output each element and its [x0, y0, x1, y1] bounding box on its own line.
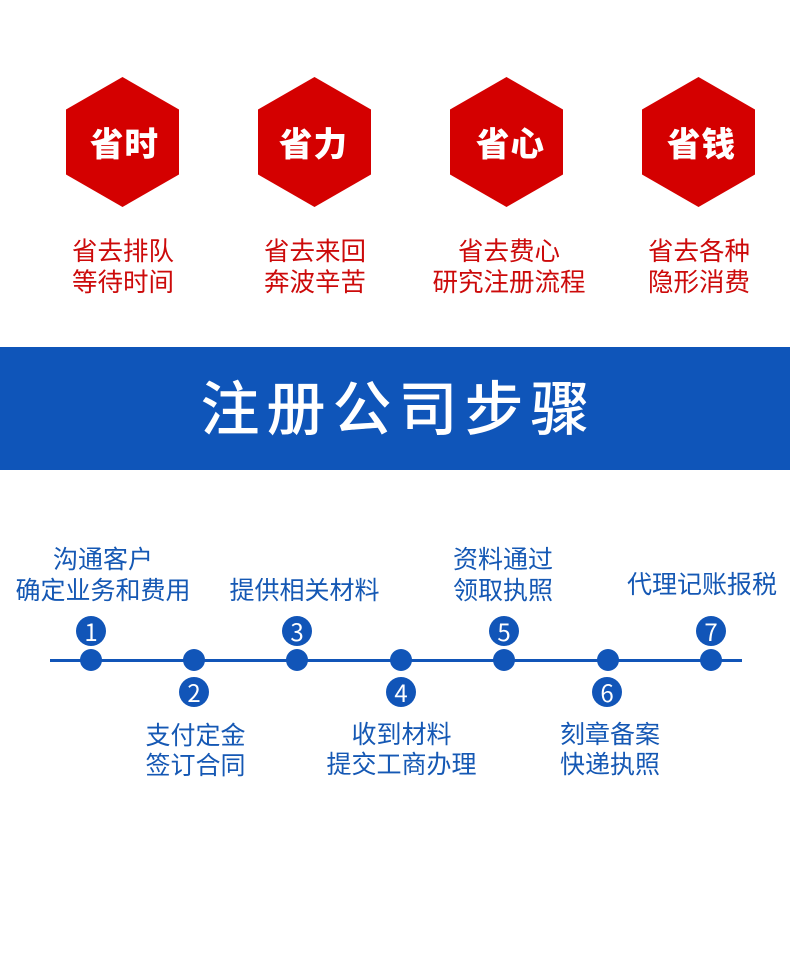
- heading: 省力: 省力: [279, 117, 348, 166]
- step 2 number: 2: [187, 674, 201, 709]
- timeline dot 6: [596, 649, 618, 671]
- text: 省去各种 隐形消费: [648, 238, 750, 297]
- step 6 text: 刻章备案: [560, 721, 660, 749]
- step 2 number: [179, 677, 209, 707]
- step 5 text: 领取执照: [453, 576, 553, 604]
- timeline dot 4: [390, 649, 412, 671]
- step 7 number: [696, 616, 726, 646]
- step 4 text: 提交工商办理: [326, 751, 476, 779]
- heading: 省心: 省心: [476, 117, 545, 166]
- step 1 number: [76, 616, 106, 646]
- banner: [0, 347, 790, 470]
- text: 省去费心 研究注册流程: [432, 238, 586, 297]
- heading: 省时: 省时: [90, 117, 159, 166]
- step 6 number: [592, 677, 622, 707]
- text: 省去来回 奔波辛苦: 奔波辛苦: [264, 269, 366, 297]
- step 6 text: [560, 721, 660, 779]
- timeline dot 3: [286, 649, 308, 671]
- step 3 number: 3: [290, 613, 304, 648]
- panel: benefit 省力: [258, 77, 371, 207]
- text: 省去费心 研究注册流程: 研究注册流程: [432, 269, 586, 297]
- text: 省去费心 研究注册流程: 省去费心: [458, 238, 560, 266]
- panel: benefit 省心: [450, 77, 563, 207]
- timeline line: [50, 659, 742, 662]
- text: 省去各种 隐形消费: 省去各种: [648, 238, 750, 266]
- step 2 text: [145, 722, 246, 780]
- panel: benefit 省钱: [642, 77, 755, 207]
- step 4 text: [326, 721, 476, 779]
- timeline dot 7: [700, 649, 722, 671]
- step 1 text: 确定业务和费用: [15, 576, 190, 604]
- step 4 number: 4: [394, 674, 408, 709]
- heading: 省钱: 省钱: [667, 117, 736, 166]
- step 7 number: 7: [704, 613, 718, 648]
- text: 省去各种 隐形消费: 隐形消费: [648, 269, 750, 297]
- step 3 text: 提供相关材料: [229, 576, 380, 604]
- step 6 number: 6: [600, 674, 614, 709]
- step 5 text: 资料通过: [453, 546, 553, 574]
- step 5 number: [489, 616, 519, 646]
- step 2 text: 签订合同: [145, 752, 246, 780]
- text: 省去来回 奔波辛苦: [264, 238, 366, 297]
- step 4 number: [386, 677, 416, 707]
- step 1 text: 沟通客户: [53, 546, 153, 574]
- timeline dot 1: [80, 649, 102, 671]
- text: 省去来回 奔波辛苦: 省去来回: [264, 238, 366, 266]
- icon: red hexagon 省心: [450, 77, 563, 207]
- timeline dot 2: [182, 649, 204, 671]
- panel: benefit 省时: [66, 77, 179, 207]
- heading: 注册公司步骤: 注册公司步骤: [200, 377, 596, 443]
- step 2 text: 支付定金: [145, 722, 246, 750]
- step 5 number: 5: [497, 613, 511, 648]
- step 5 text: [453, 546, 553, 604]
- icon: red hexagon 省力: [258, 77, 371, 207]
- icon: red hexagon 省钱: [642, 77, 755, 207]
- step 1 number: 1: [84, 613, 98, 648]
- icon: red hexagon 省时: [66, 77, 179, 207]
- step 3 number: [282, 616, 312, 646]
- step 1 text: [15, 546, 190, 604]
- timeline dot 5: [492, 649, 514, 671]
- step 6 text: 快递执照: [560, 751, 660, 779]
- step 4 text: 收到材料: [351, 721, 452, 749]
- text: 省去排队 等待时间: 等待时间: [72, 269, 174, 297]
- text: 省去排队 等待时间: 省去排队: [72, 238, 174, 266]
- text: 省去排队 等待时间: [72, 238, 174, 297]
- step 7 text: 代理记账报税: [627, 570, 777, 598]
